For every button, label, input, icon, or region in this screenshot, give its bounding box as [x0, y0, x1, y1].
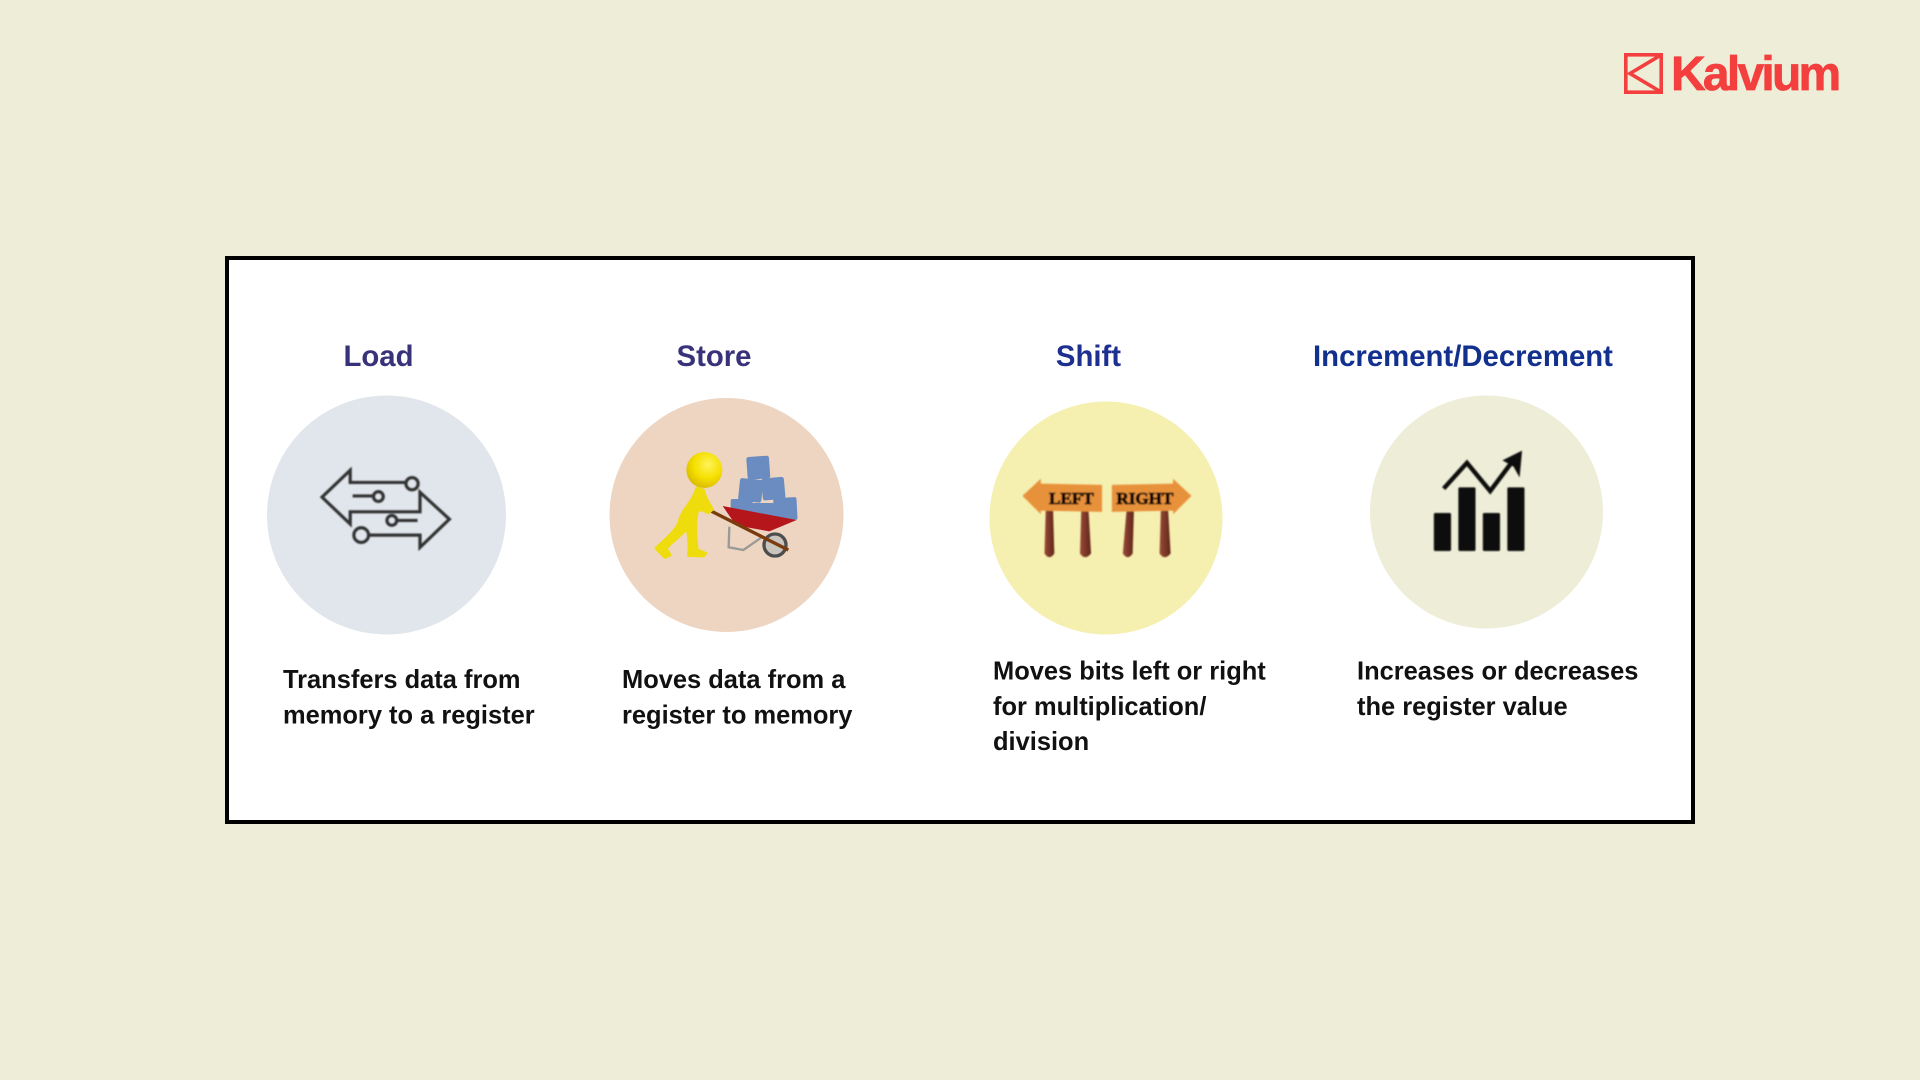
description: Store: Moves data from a: [622, 666, 846, 694]
heading: Store: Store: [677, 340, 751, 373]
description: Shift: for multiplication/: [993, 693, 1206, 721]
description: Load: memory to a register: [283, 702, 535, 730]
circle: Load background: [267, 396, 506, 634]
icon: figure pushing wheelbarrow: [656, 452, 797, 557]
description: Load: Transfers data from: [283, 666, 520, 694]
description: Increment/Decrement: the register value: [1357, 693, 1568, 721]
column: Shift: [990, 340, 1266, 756]
heading: Shift: Shift: [1056, 340, 1121, 373]
column: Increment/Decrement: [1313, 340, 1638, 721]
column: Load: [267, 340, 535, 730]
circle: Increment/Decrement background: [1370, 396, 1603, 628]
icon: Kalvium mark: [1626, 55, 1661, 92]
circle: Shift background: [990, 402, 1222, 634]
heading: Load: Load: [343, 340, 414, 373]
circle: Store background: [610, 398, 844, 632]
icon: rising bar chart: [1434, 451, 1524, 551]
icon: left and right signs: [1022, 479, 1191, 557]
heading: Increment/Decrement: Increment/Decrement: [1313, 340, 1613, 373]
logo: Kalvium: [1626, 48, 1839, 101]
icon: left and right signs: RIGHT: [1116, 489, 1174, 508]
logo wordmark: Kalvium: [1671, 48, 1839, 101]
icon: left and right signs: LEFT: [1049, 489, 1094, 508]
description: Shift: Moves bits left or right: [993, 658, 1266, 686]
column: Store: [610, 340, 853, 730]
icon: data transfer arrows: [322, 470, 449, 547]
description: Store: register to memory: [622, 702, 853, 730]
description: Shift: division: [993, 728, 1089, 756]
panel: register operations: [227, 258, 1693, 822]
description: Increment/Decrement: Increases or decreases: [1357, 658, 1638, 686]
